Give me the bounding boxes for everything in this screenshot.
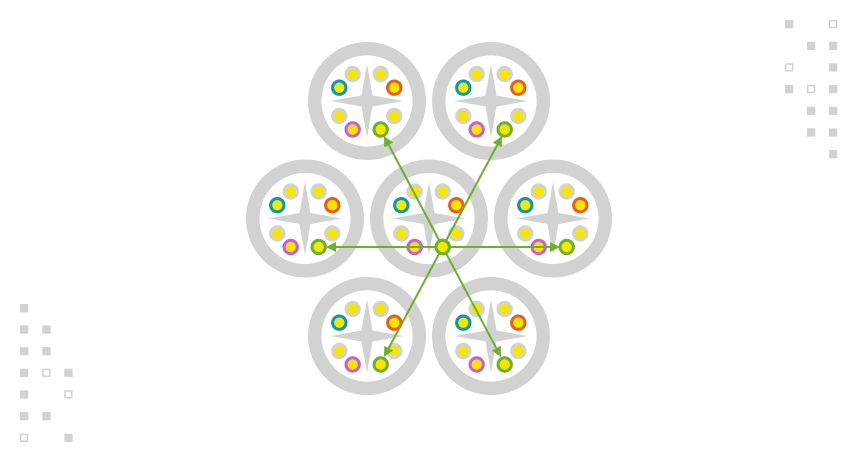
arrow: to middle left cable: [326, 242, 443, 252]
center source wire: [436, 240, 449, 254]
cable: middle left: [253, 166, 357, 271]
decorative squares: bottom left: [20, 304, 73, 442]
arrow: to bottom left cable: [384, 247, 443, 357]
arrow: to top left cable: [384, 136, 443, 247]
arrow: to middle right cable: [443, 242, 560, 252]
cable: bottom left: [315, 284, 419, 388]
cable: top left: [315, 49, 419, 153]
arrows radiating from the center wire: [326, 136, 560, 357]
arrow: to bottom right cable: [443, 247, 501, 357]
cable: middle right: [501, 166, 605, 271]
cable: center: [377, 166, 481, 271]
arrow: to top right cable: [443, 136, 502, 247]
decorative squares: top right: [785, 20, 837, 158]
cable: top right: [439, 49, 543, 153]
cable: bottom right: [439, 284, 543, 388]
